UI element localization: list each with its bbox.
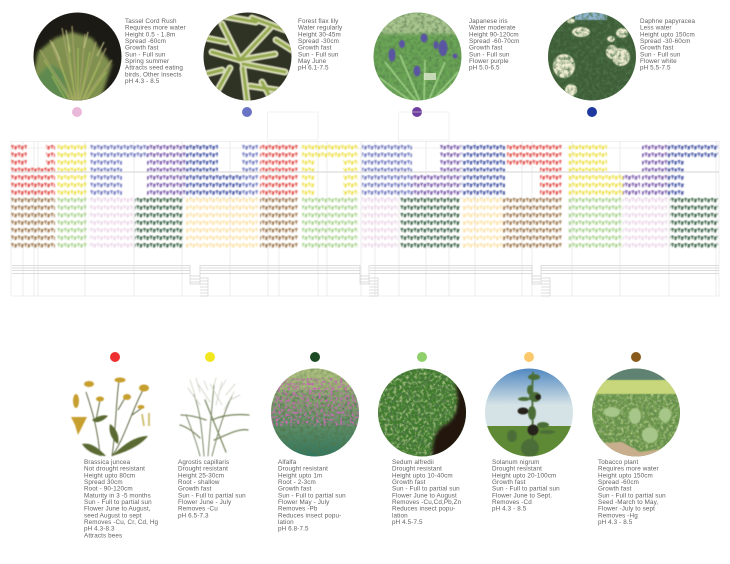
colour key: pink [72,107,82,117]
details: sedum alfredii: lation [392,512,408,519]
planting rows: lower storey [11,198,718,250]
panel: Tobacco plant [592,352,680,526]
details: brassica juncea: Root - 90-120cm [84,486,133,493]
details: forest flax lily: Sun - Full sun [298,51,339,58]
details: alfalfa: Root - 2-3cm [278,479,316,486]
details: forest flax lily: Water regularly [298,25,343,32]
details: sedum alfredii: Sun - Full to partial sun [392,486,460,493]
details: tobacco plant: Removes -Hg [598,512,638,519]
details: agrostis capillaris: Height 25-30cm [178,472,224,479]
details: japanese iris: Growth fast [469,45,503,52]
details: agrostis capillaris: Removes -Cu [178,506,218,513]
details: sedum alfredii: Flower June to August [392,492,457,499]
details: tassel cord rush: Spread -60cm [125,38,166,45]
details: brassica juncea: Maturity in 3 -5 months [84,492,151,499]
panel: Brassica juncea [71,352,159,539]
details: sedum alfredii: Reduces insect popu- [392,506,455,513]
details: forest flax lily: Height 30-45m [298,31,341,38]
details: daphne papyracea: Less water [640,25,672,32]
details: forest flax lily: Growth fast [298,45,332,52]
details: alfalfa: Drought resistant [278,466,328,473]
details: sedum alfredii: pH 4.5-7.5 [392,519,423,526]
details: japanese iris: Flower purple [469,58,509,65]
panel: Alfalfa [271,352,359,533]
details: solanum nigrum: pH 4.3 - 8.5 [492,506,527,513]
details: tobacco plant: Spread -60cm [598,479,639,486]
details: alfalfa: lation [278,519,294,526]
colour key: red [110,352,120,362]
details: agrostis capillaris: pH 6.5-7.3 [178,512,209,519]
photo: solanum nigrum [485,368,573,458]
details: daphne papyracea: Daphne papyracea [640,18,696,25]
details: daphne papyracea: pH 5.5-7.5 [640,65,671,72]
details: tobacco plant: Requires more water [598,466,659,473]
details: solanum nigrum: Height upto 20-100cm [492,472,556,479]
details: daphne papyracea: Sun - Full sun [640,51,681,58]
details: tassel cord rush: pH 4.3 - 8.5 [125,78,160,85]
details: agrostis capillaris: Agrostis capillaris [178,459,229,466]
details: solanum nigrum: Flower June to Sept. [492,492,552,499]
details: brassica juncea: Brassica juncea [84,459,131,466]
details: forest flax lily: May June [298,58,327,65]
details: solanum nigrum: Removes -Cd [492,499,532,506]
details: alfalfa: Flower May - July [278,499,330,506]
details: tobacco plant: Flower -July to sept [598,506,655,513]
details: tobacco plant: Seed -March to May, [598,499,658,506]
details: solanum nigrum: Sun - Full to partial sun [492,486,560,493]
details: tassel cord rush: Attracts seed eating [125,65,183,72]
details: japanese iris: pH 5.0-6.5 [469,65,500,72]
details: tassel cord rush: Requires more water [125,25,186,32]
details: brassica juncea: Removes -Cu, Cr, Cd, Hg [84,519,159,526]
details: sedum alfredii: Growth fast [392,479,426,486]
planting rows: upper storey [11,145,718,198]
details: tobacco plant: Growth fast [598,486,632,493]
details: solanum nigrum: Drought resistant [492,466,542,473]
details: brassica juncea: Height upto 80cm [84,472,135,479]
details: japanese iris: Water moderate [469,25,516,32]
details: sedum alfredii: Removes -Cu,Cd,Pb,Zn [392,499,462,506]
details: forest flax lily: Forest flax lily [298,18,339,25]
panel: Solanum nigrum [485,352,573,513]
details: alfalfa: Alfalfa [278,459,297,466]
illustration: brassica juncea [71,378,149,456]
photo: japanese iris [373,12,463,102]
details: alfalfa: Reduces insect popu- [278,512,341,519]
details: tobacco plant: Tobacco plant [598,459,639,466]
details: brassica juncea: pH 4.3-8.3 [84,526,115,533]
photo: forest flax lily [203,12,293,102]
colour key: purple [412,107,422,117]
details: solanum nigrum: Growth fast [492,479,526,486]
details: brassica juncea: Flower June to August, [84,506,151,513]
details: tassel cord rush: birds, Other insects [125,71,182,78]
details: alfalfa: Height upto 1m [278,472,322,479]
details: daphne papyracea: Flower white [640,58,677,65]
panel: Forest flax lily [203,12,343,117]
colour key: brown [631,352,641,362]
details: alfalfa: Growth fast [278,486,312,493]
details: sedum alfredii: Sedum alfredii [392,459,434,466]
details: agrostis capillaris: Growth fast [178,486,212,493]
details: agrostis capillaris: Sun - Full to partial sun [178,492,246,499]
details: forest flax lily: Spread -30cm [298,38,339,45]
details: japanese iris: Height 90-120cm [469,31,519,38]
floor slab and stairs [12,172,719,296]
details: brassica juncea: Attracts bees [84,532,122,539]
details: tassel cord rush: Growth fast [125,45,159,52]
details: tassel cord rush: Height 0.5 - 1.8m [125,31,175,38]
panel: Japanese iris [373,12,519,117]
photo: daphne papyracea [548,11,638,102]
photo: sedum alfredii [378,368,470,460]
colour key: periwinkle [242,107,252,117]
colour key: light orange [524,352,534,362]
details: japanese iris: Sun - Full sun [469,51,510,58]
details: alfalfa: pH 6.8-7.5 [278,526,309,533]
details: forest flax lily: pH 6.1-7.5 [298,65,329,72]
panel: Tassel Cord Rush [33,12,186,117]
details: japanese iris: Spread -60-70cm [469,38,519,45]
details: daphne papyracea: Growth fast [640,45,674,52]
photo: alfalfa [271,368,359,458]
details: tobacco plant: Height upto 150cm [598,472,653,479]
details: sedum alfredii: Height upto 10-40cm [392,472,453,479]
details: daphne papyracea: Height upto 150cm [640,31,695,38]
details: agrostis capillaris: Drought resistant [178,466,228,473]
details: brassica juncea: Sun - Full to partial sun [84,499,152,506]
details: tassel cord rush: Sun - Full sun [125,51,166,58]
details: japanese iris: Japanese iris [469,18,508,25]
colour key: yellow [205,352,215,362]
details: agrostis capillaris: Root - shallow [178,479,220,486]
details: agrostis capillaris: Flower June - July [178,499,232,506]
colour key: dark green [310,352,320,362]
details: alfalfa: Removes -Pb [278,506,318,513]
colour key: light green [417,352,427,362]
details: brassica juncea: Not drought resistant [84,466,145,473]
photo: tassel cord rush [33,12,123,102]
details: tobacco plant: Sun - Full to partial sun [598,492,666,499]
details: tassel cord rush: Spring summer [125,58,169,65]
details: brassica juncea: Spread 30cm [84,479,123,486]
details: solanum nigrum: Solanum nigrum [492,459,540,466]
details: alfalfa: Sun - Full to partial sun [278,492,346,499]
panel: Daphne papyracea [548,11,696,117]
details: daphne papyracea: Spread -30-60cm [640,38,690,45]
planted elevation drawing [11,112,720,296]
colour key: dark blue [587,107,597,117]
details: sedum alfredii: Drought resistant [392,466,442,473]
details: tobacco plant: pH 4.3 - 8.5 [598,519,633,526]
details: brassica juncea: seed August to sept [84,512,142,519]
panel: Sedum alfredii [378,352,470,526]
illustration: agrostis capillaris [180,378,249,456]
panel: Agrostis capillaris [178,352,249,519]
photo: tobacco plant [592,368,680,458]
details: tassel cord rush: Tassel Cord Rush [125,18,177,25]
